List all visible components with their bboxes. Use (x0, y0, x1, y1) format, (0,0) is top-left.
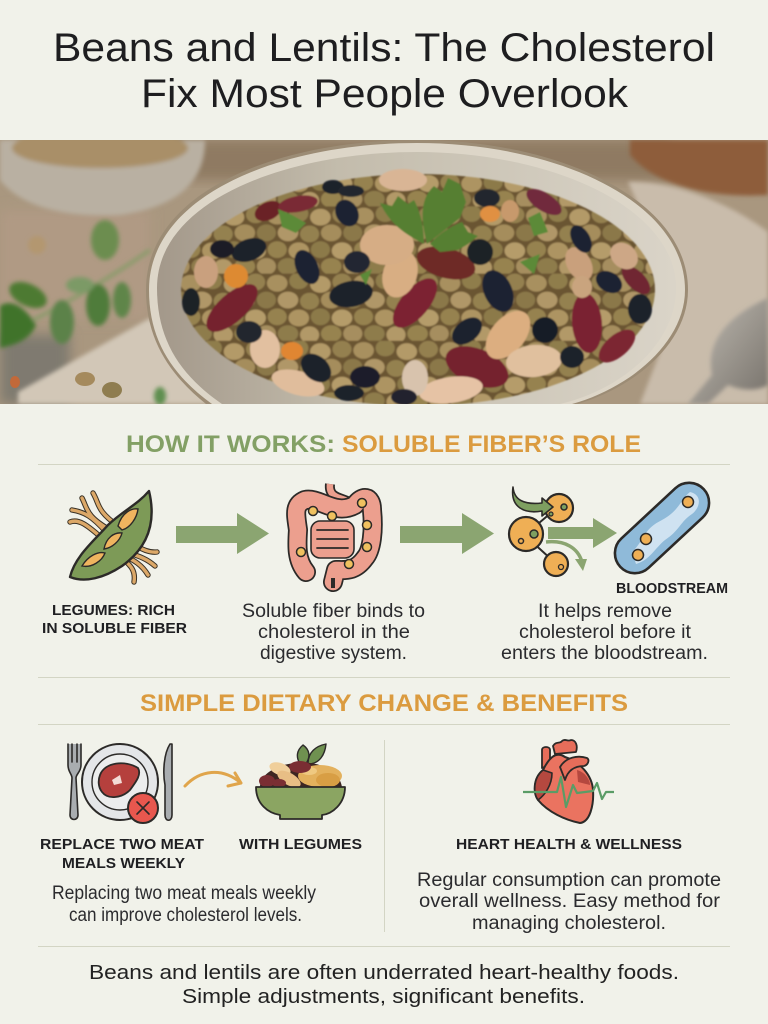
label: replace two meat meals: REPLACE TWO MEAT (40, 837, 204, 853)
main bowl (146, 140, 688, 404)
title: Beans and Lentils: The Cholesterol (53, 26, 715, 70)
icon: plate with meat, fork and knife (68, 744, 172, 823)
parsley (380, 178, 478, 252)
icon: legume pod (70, 491, 157, 582)
label: with legumes: WITH LEGUMES (239, 837, 362, 853)
footer text: Beans and lentils are often underrated heart-healthy foods. (89, 962, 679, 984)
label: legumes rich in soluble fiber: LEGUMES: RICH (52, 603, 175, 619)
photo: bowl of beans and lentils (0, 128, 768, 407)
label: replace two meat meals (40, 837, 204, 872)
linen cloth left (18, 318, 210, 404)
arrow: curved replace arrow (185, 772, 241, 786)
arrow (176, 513, 269, 554)
icon: blood vessel (607, 474, 717, 582)
footer text (89, 962, 679, 1008)
black beans (476, 265, 520, 317)
arrow (400, 513, 494, 554)
arrow (548, 518, 617, 548)
white beans (376, 246, 424, 302)
heading: how it works: SOLUBLE FIBER’S ROLE (342, 431, 641, 458)
text: soluble fiber binds (242, 601, 425, 664)
text: removes cholesterol: enters the bloodstream. (501, 643, 708, 664)
orange lentils (224, 264, 248, 288)
icon: cholesterol particles (509, 487, 587, 576)
icon: bowl of legumes (256, 744, 345, 819)
icon: digestive system (296, 484, 373, 588)
text: regular consumption: overall wellness. Easy method for (419, 891, 721, 912)
text: replacing meals (52, 883, 316, 926)
spoon (688, 298, 768, 404)
icon: heart with pulse (523, 740, 614, 823)
text: replacing meals: can improve cholesterol levels. (69, 905, 302, 926)
herb sprig (0, 220, 166, 405)
text: regular consumption: managing cholesterol. (472, 913, 666, 934)
text: removes cholesterol (501, 601, 708, 664)
label: replace two meat meals: MEALS WEEKLY (62, 856, 185, 872)
footer text: Simple adjustments, significant benefits. (182, 986, 585, 1008)
linen cloth right (628, 182, 768, 404)
text: regular consumption (417, 870, 721, 934)
text: soluble fiber binds: digestive system. (260, 643, 407, 664)
label: bloodstream: BLOODSTREAM (616, 581, 728, 597)
heading: how it works: HOW IT WORKS: (126, 431, 335, 458)
heading: how it works (126, 431, 641, 458)
text: removes cholesterol: It helps remove (538, 601, 672, 622)
small bowl top left (0, 128, 205, 215)
text: soluble fiber binds: Soluble fiber binds to (242, 601, 425, 622)
title (53, 26, 715, 116)
label: legumes rich in soluble fiber: IN SOLUBLE FIBER (42, 621, 188, 637)
kidney beans (199, 276, 265, 340)
label: legumes rich in soluble fiber (42, 603, 188, 637)
heading: simple dietary change: SIMPLE DIETARY CHANGE & BENEFITS (140, 690, 628, 717)
terracotta bowl top right (630, 140, 768, 196)
lentils (181, 169, 655, 407)
text: soluble fiber binds: cholesterol in the (258, 622, 410, 643)
text: regular consumption: Regular consumption can promote (417, 870, 721, 891)
title: Fix Most People Overlook (141, 72, 629, 116)
text: replacing meals: Replacing two meat meals weekly (52, 883, 316, 904)
text: removes cholesterol: cholesterol before it (519, 622, 692, 643)
label: heart health: HEART HEALTH & WELLNESS (456, 837, 682, 853)
